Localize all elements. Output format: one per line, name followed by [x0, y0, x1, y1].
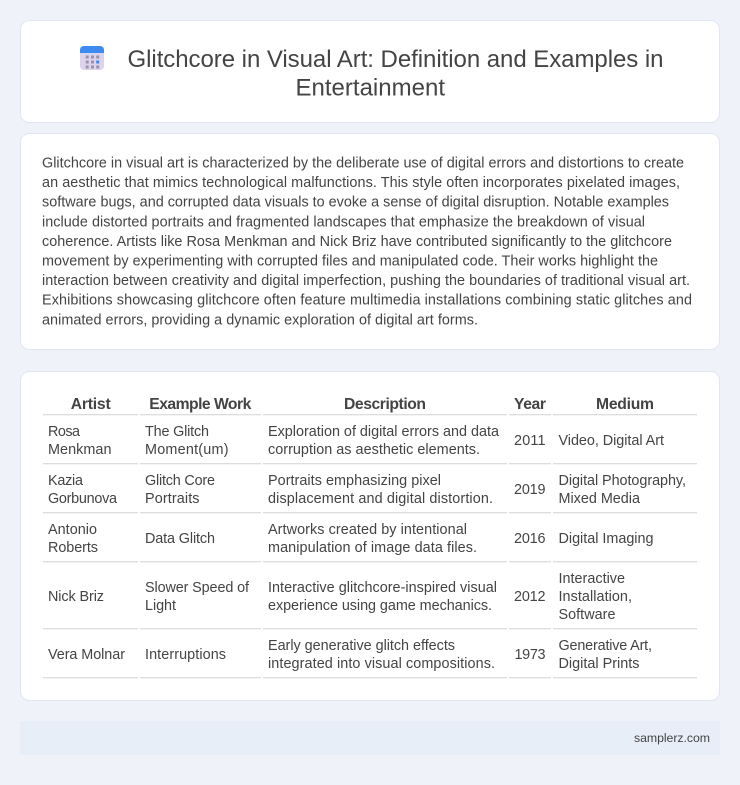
- table row: Nick Briz: Installation,: [558, 589, 632, 605]
- table header row: Year: [514, 396, 546, 413]
- text block: description paragraph: Glitchcore in visual art is characterized by the deliberate use of digital errors and distortions to create: [42, 156, 684, 172]
- panel: artists table: [20, 372, 720, 700]
- text block: description paragraph: coherence. Artists like Rosa Menkman and Nick Briz have contributed significantly to the glitchcore: [42, 234, 672, 250]
- table header row: [43, 396, 697, 415]
- panel: header: [20, 20, 720, 122]
- table row: Vera Molnar: [43, 638, 697, 678]
- text block: description paragraph: Exhibitions showcasing glitchcore often feature multimedia installations combining static glitches and: [42, 293, 692, 309]
- table row: Kazia Gorbunova: Gorbunova: [48, 491, 117, 507]
- text block: description paragraph: animated errors, providing a dynamic exploration of digital art forms.: [42, 312, 478, 328]
- title: [128, 46, 664, 102]
- table row: Antonio Roberts: Digital Imaging: [558, 531, 654, 547]
- table row: Nick Briz: Software: [558, 607, 616, 623]
- table row: Nick Briz: 2012: [514, 589, 546, 605]
- table row: Rosa Menkman: Moment(um): [145, 442, 228, 458]
- table row: Nick Briz: [43, 571, 697, 629]
- title: Entertainment: [296, 74, 445, 102]
- table row: Antonio Roberts: Antonio: [48, 522, 97, 538]
- table row: Nick Briz: Interactive: [558, 571, 625, 587]
- table row: Vera Molnar: Interruptions: [145, 647, 226, 663]
- text block: description paragraph: software bugs, and corrupted data visuals to evoke a sense of digital disruption. Notable examples: [42, 195, 669, 211]
- table row: Rosa Menkman: Exploration of digital errors and data: [268, 424, 499, 440]
- table row: Nick Briz: Interactive glitchcore-inspired visual: [268, 580, 497, 596]
- table row: Nick Briz: Light: [145, 598, 176, 614]
- table row: Nick Briz: Slower Speed of: [145, 580, 250, 596]
- table row: Rosa Menkman: [43, 424, 697, 464]
- table row: Nick Briz: experience using game mechanics.: [268, 598, 492, 614]
- table row: Rosa Menkman: Menkman: [48, 442, 112, 458]
- table row: Vera Molnar: Early generative glitch effects: [268, 638, 455, 654]
- footer source text: samplerz.com: [634, 731, 710, 745]
- table row: Antonio Roberts: [43, 522, 697, 562]
- table row: Kazia Gorbunova: 2019: [514, 482, 546, 498]
- table header row: Example Work: [149, 396, 252, 413]
- text block: description paragraph: [42, 156, 692, 328]
- table row: Rosa Menkman: The Glitch: [145, 424, 209, 440]
- table header row: Description: [344, 396, 426, 413]
- table row: Kazia Gorbunova: Glitch Core: [145, 473, 215, 489]
- table row: Rosa Menkman: corruption as aesthetic elements.: [268, 442, 480, 458]
- table row: Kazia Gorbunova: [43, 473, 697, 513]
- table row: Rosa Menkman: Rosa: [48, 424, 80, 440]
- table row: Kazia Gorbunova: Kazia: [48, 473, 83, 489]
- table row: Rosa Menkman: Video, Digital Art: [558, 433, 664, 449]
- table row: Kazia Gorbunova: Portraits emphasizing pixel: [268, 473, 441, 489]
- icon: calendar: [80, 46, 104, 70]
- table row: Kazia Gorbunova: Digital Photography,: [558, 473, 686, 489]
- text block: description paragraph: interaction between creativity and digital imperfection, pushing the boundaries of traditional visual art.: [42, 273, 690, 289]
- table row: Nick Briz: Nick Briz: [48, 589, 104, 605]
- table row: Vera Molnar: integrated into visual compositions.: [268, 656, 495, 672]
- table row: Vera Molnar: Digital Prints: [558, 656, 640, 672]
- title: Glitchcore in Visual Art: Definition and Examples in: [128, 46, 664, 73]
- table row: Antonio Roberts: Artworks created by intentional: [268, 522, 467, 538]
- table header row: Medium: [596, 396, 654, 413]
- text block: description paragraph: an aesthetic that mimics technological malfunctions. This style often incorporates pixelated images,: [42, 175, 680, 191]
- text block: description paragraph: movement by experimenting with corrupted files and manipulated code. Their works highlight the: [42, 254, 658, 270]
- table header row: Artist: [71, 396, 111, 413]
- panel: description: [20, 134, 720, 350]
- table row: Vera Molnar: Generative Art,: [558, 638, 652, 654]
- table row: Rosa Menkman: 2011: [514, 433, 546, 449]
- table row: Vera Molnar: Vera Molnar: [48, 647, 125, 663]
- table row: Kazia Gorbunova: displacement and digital distortion.: [268, 491, 493, 507]
- table row: Antonio Roberts: 2016: [514, 531, 546, 547]
- table row: Antonio Roberts: manipulation of image data files.: [268, 540, 477, 556]
- table row: Antonio Roberts: Data Glitch: [145, 531, 215, 547]
- table row: Kazia Gorbunova: Mixed Media: [558, 491, 640, 507]
- table row: Kazia Gorbunova: Portraits: [145, 491, 200, 507]
- table row: Vera Molnar: 1973: [514, 647, 546, 663]
- footer: [20, 721, 720, 755]
- text block: description paragraph: include distorted portraits and fragmented landscapes that emphasize the breakdown of visual: [42, 214, 645, 230]
- table row: Antonio Roberts: Roberts: [48, 540, 98, 556]
